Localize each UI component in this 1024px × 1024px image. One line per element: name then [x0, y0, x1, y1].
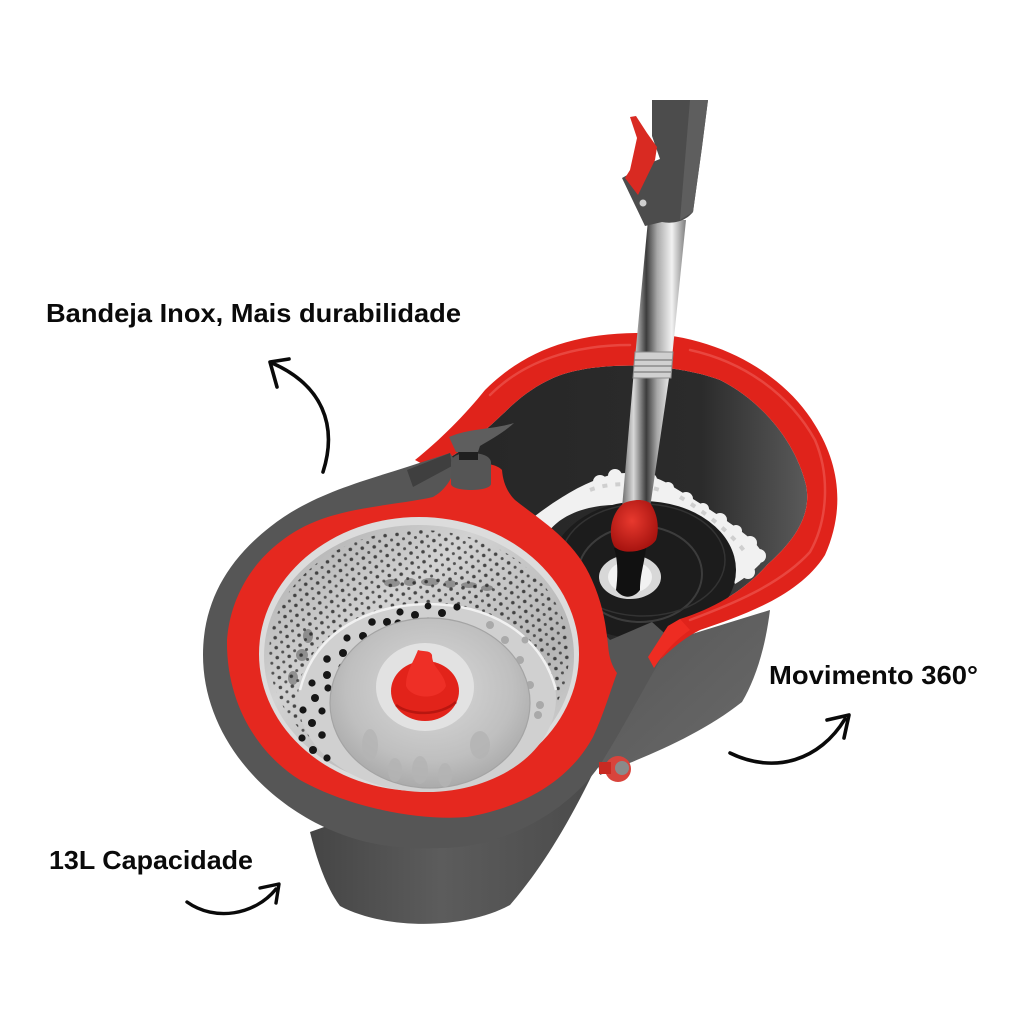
centre plate: [330, 618, 530, 788]
plate dimples: [362, 729, 490, 787]
red pole joint: [611, 500, 658, 552]
bucket body: front section: [310, 750, 600, 924]
product: spin mop bucket: [203, 100, 837, 924]
light perforations on the right: [486, 621, 544, 719]
bucket body: right back section: [590, 610, 770, 775]
grey rim handle joint: [407, 453, 452, 487]
telescopic pole: [622, 220, 686, 508]
interior of rear tub: [430, 366, 807, 665]
arrow: capacity: [187, 884, 279, 914]
red rim of rear tub: [415, 333, 837, 668]
arrow: movement: [730, 715, 849, 763]
soap pump: [449, 423, 514, 490]
arrow: tray: [270, 359, 328, 472]
white mop head: [535, 469, 766, 584]
drain plug knob: [599, 756, 631, 782]
red centre knob: [391, 650, 459, 721]
red lever: [625, 116, 657, 195]
dark reflections on the wall: [288, 578, 493, 685]
grey rim of front bucket: [203, 453, 672, 848]
mop pole neck: [614, 548, 646, 597]
label: movement: Movimento 360°: [769, 660, 978, 690]
basket floor: [298, 604, 556, 792]
label: tray: Bandeja Inox, Mais durabilidade: [46, 298, 461, 328]
basket wall: [259, 517, 579, 791]
basket washer: [376, 643, 474, 731]
pole grip and lever: [622, 100, 708, 226]
black spinner disc: [550, 501, 736, 639]
stainless steel basket: [259, 517, 579, 792]
label: capacity: 13L Capacidade: [49, 845, 253, 875]
pole collar: [633, 352, 673, 378]
large perforations: [298, 603, 461, 762]
red clip on right side of rim: [648, 619, 690, 668]
red ring of front bucket: [227, 463, 617, 818]
